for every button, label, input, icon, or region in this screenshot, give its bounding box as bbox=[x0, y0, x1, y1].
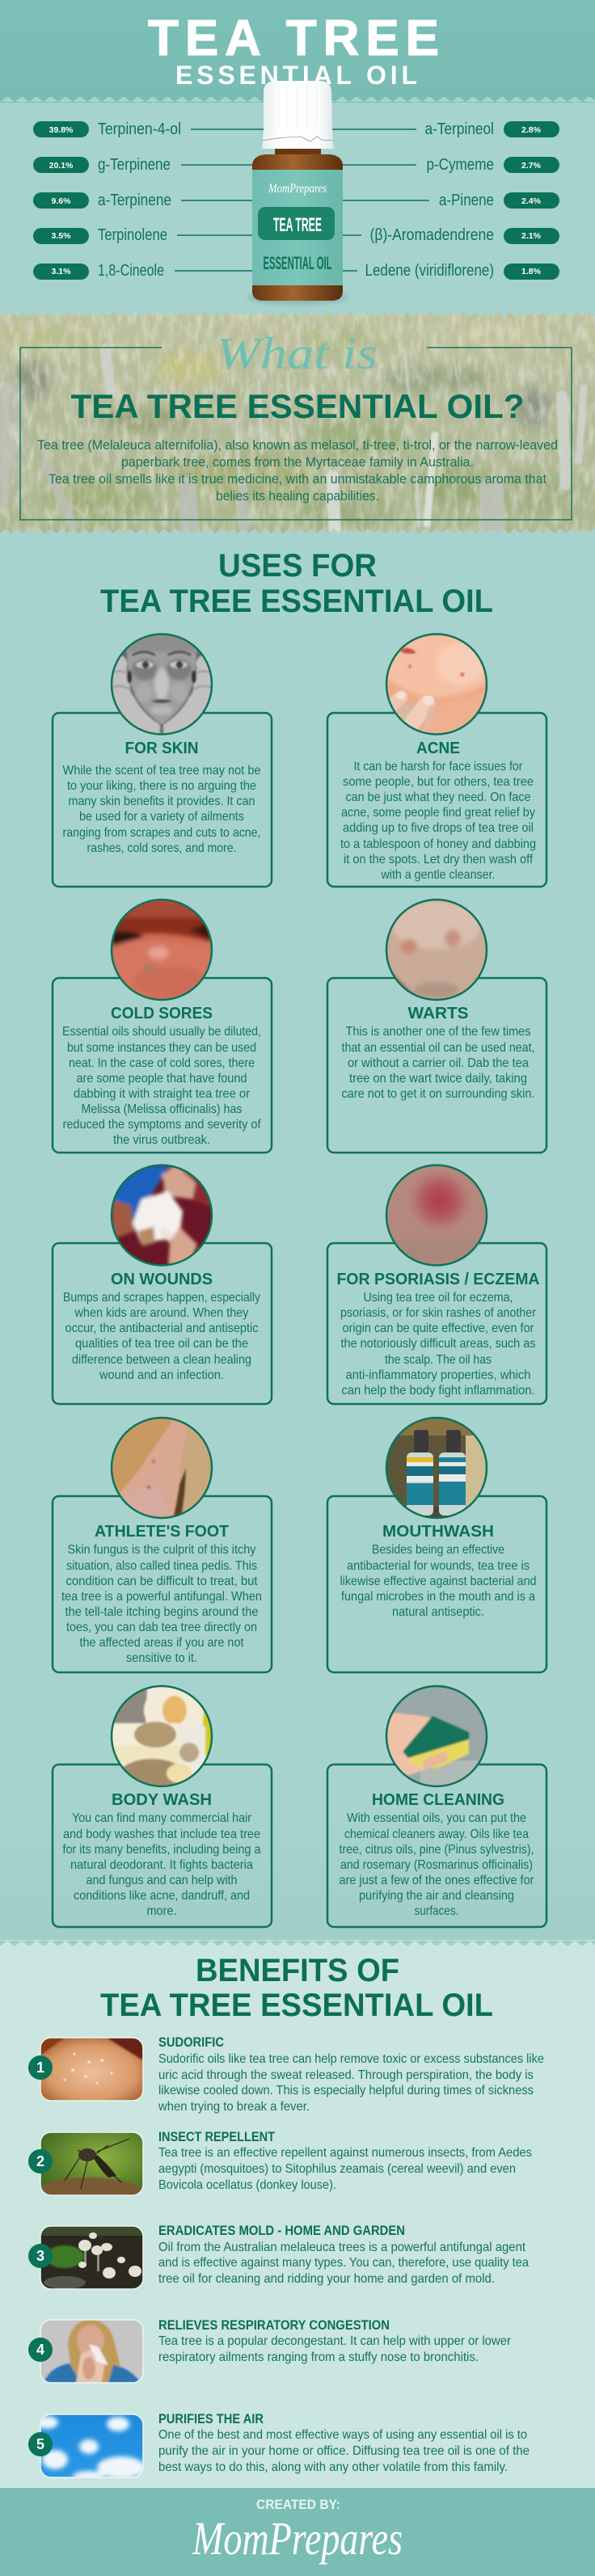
card text bbox=[62, 1025, 261, 1147]
number badge: 3 bbox=[36, 2248, 44, 2264]
card text: are just a few of the ones effective for bbox=[340, 1874, 534, 1887]
heading: uses for bbox=[100, 548, 493, 619]
card text: adding up to five drops of tea tree oil bbox=[343, 821, 534, 835]
panel: warts bbox=[327, 900, 546, 1153]
panel: mouthwash bbox=[327, 1418, 546, 1672]
card text: likewise effective against bacterial and bbox=[340, 1575, 537, 1588]
card text: but some instances they can be used bbox=[67, 1041, 256, 1055]
photo: sponge bbox=[386, 1686, 487, 1786]
card text: can help the body fight inflammation. bbox=[341, 1384, 535, 1398]
photo: acne skin bbox=[386, 634, 487, 734]
card text: that an essential oil can be used neat, bbox=[341, 1041, 535, 1055]
photo: soap and flower bbox=[112, 1686, 212, 1794]
benefit text: respiratory ailments ranging from a stuffy nose to bronchitis. bbox=[158, 2350, 479, 2364]
card text: the notoriously difficult areas, such as bbox=[341, 1337, 535, 1351]
card text: more. bbox=[147, 1904, 176, 1918]
panel: what is frame bbox=[20, 348, 572, 520]
benefit text: Tea tree is an effective repellent against numerous insects, from Aedes bbox=[158, 2146, 532, 2160]
panel: athletes foot bbox=[53, 1418, 272, 1672]
right compound names: Ledene (viridiflorene) bbox=[365, 262, 494, 280]
card text: Skin fungus is the culprit of this itchy bbox=[68, 1543, 255, 1557]
right percentages: 1.8% bbox=[521, 267, 542, 276]
benefit text bbox=[158, 2334, 512, 2364]
card text: dabbing it with straight tea tree or bbox=[74, 1087, 251, 1101]
benefit 4: respiratory congestion bbox=[28, 2317, 512, 2383]
card text: for its many benefits, including being a bbox=[63, 1843, 261, 1857]
bottle cap bbox=[262, 81, 334, 149]
card text: and body washes that include tea tree bbox=[63, 1828, 260, 1841]
photo: rash bbox=[386, 1166, 487, 1266]
card text bbox=[63, 1811, 261, 1918]
card text: condition can be difficult to treat, but bbox=[66, 1575, 258, 1588]
left percentages: 20.1% bbox=[49, 161, 74, 171]
card text: surfaces. bbox=[414, 1904, 459, 1918]
panel: forest photo band bbox=[0, 312, 595, 533]
title: ESSENTIAL OIL bbox=[175, 61, 417, 90]
card text: While the scent of tea tree may not be bbox=[63, 764, 261, 778]
card text: origin can be quite effective, even for bbox=[343, 1322, 534, 1335]
left percentages: 3.5% bbox=[52, 231, 71, 241]
card text: This is another one of the few times bbox=[346, 1025, 530, 1039]
right compound names: a-Terpineol bbox=[425, 120, 494, 138]
benefit heading: INSECT REPELLENT bbox=[158, 2129, 276, 2144]
card text bbox=[341, 1025, 535, 1101]
card text: neat. In the case of cold sores, there bbox=[69, 1056, 255, 1070]
panel: body wash bbox=[53, 1686, 272, 1927]
card heading: FOR PSORIASIS / ECZEMA bbox=[336, 1271, 540, 1288]
card heading: ATHLETE'S FOOT bbox=[95, 1523, 229, 1541]
panel: benefits background bbox=[0, 1940, 595, 2489]
card text: Besides being an effective bbox=[372, 1543, 504, 1557]
benefit text bbox=[158, 2052, 544, 2114]
left percentages: 3.1% bbox=[52, 267, 71, 276]
right compound names: a-Pinene bbox=[439, 192, 494, 209]
connector lines bbox=[175, 129, 429, 271]
card text: tree on the wart twice daily, taking bbox=[349, 1072, 527, 1086]
benefit text: tree oil for cleaning and ridding your home and garden of mold. bbox=[158, 2272, 495, 2286]
benefit text: aegypti (mosquitoes) to Sitophilus zeamais (cereal weevil) and even bbox=[158, 2162, 516, 2176]
card text: the affected areas if you are not bbox=[79, 1636, 244, 1650]
benefit text bbox=[158, 2428, 530, 2474]
card text: ranging from scrapes and cuts to acne, bbox=[63, 826, 260, 840]
heading: what is script: What is bbox=[216, 329, 378, 379]
card text: the tell-tale itching begins around the bbox=[65, 1605, 259, 1619]
number badge bbox=[28, 2149, 53, 2173]
card heading: ACNE bbox=[416, 740, 460, 757]
panel: header band bbox=[0, 0, 595, 103]
benefit text: best ways to do this, along with any other volatile from this family. bbox=[158, 2460, 508, 2474]
card heading: COLD SORES bbox=[111, 1005, 213, 1022]
card text: natural antiseptic. bbox=[392, 1605, 484, 1619]
right percentages: 2.4% bbox=[521, 196, 542, 206]
text block: intro: Tea tree oil smells like it is true medicine, with an unmistakable camphorous aroma that bbox=[49, 471, 546, 487]
bottle label: ESSENTIAL OIL bbox=[264, 253, 331, 273]
left compound names bbox=[98, 120, 181, 280]
benefit heading: PURIFIES THE AIR bbox=[158, 2411, 264, 2426]
card heading: ON WOUNDS bbox=[111, 1271, 213, 1288]
benefit text: Oil from the Australian melaleuca trees is a powerful antifungal agent bbox=[158, 2241, 526, 2254]
benefit 1: sudorific bbox=[28, 2034, 544, 2114]
heading: benefits: BENEFITS OF bbox=[196, 1953, 399, 1988]
card text: sensitive to it. bbox=[126, 1651, 197, 1665]
card text: it on the spots. Let dry then wash off bbox=[344, 853, 534, 866]
card text: acne, some people find great relief by bbox=[341, 806, 535, 820]
photo: mouthwash bottles bbox=[386, 1418, 487, 1518]
right compound names: (β)-Aromadendrene bbox=[370, 226, 494, 244]
card text: purifying the air and cleansing bbox=[359, 1889, 514, 1903]
left compound names: a-Terpinene bbox=[98, 192, 171, 209]
heading: benefits bbox=[100, 1953, 493, 2023]
heading: benefits: TEA TREE ESSENTIAL OIL bbox=[100, 1988, 493, 2023]
panel: acne bbox=[327, 634, 546, 887]
heading: tea tree essential oil question: TEA TREE ESSENTIAL OIL? bbox=[71, 387, 524, 425]
card text: With essential oils, you can put the bbox=[347, 1811, 526, 1825]
card text: anti-inflammatory properties, which bbox=[346, 1368, 530, 1382]
text block: intro: belies its healing capabilities. bbox=[216, 488, 379, 504]
bottle label bbox=[252, 170, 343, 285]
card text: chemical cleaners away. Oils like tea bbox=[344, 1828, 529, 1841]
benefit 2: insect repellent bbox=[28, 2129, 532, 2195]
card text: Using tea tree oil for eczema, bbox=[364, 1291, 513, 1305]
card text: to a tablespoon of honey and dabbing bbox=[340, 837, 536, 851]
photo: warts bbox=[386, 900, 487, 1000]
card text: qualities of tea tree oil can be the bbox=[75, 1337, 248, 1351]
number badge: 1 bbox=[36, 2060, 44, 2076]
card text: and fungus and can help with bbox=[86, 1874, 238, 1887]
photo: face bbox=[112, 634, 212, 734]
text block: intro: Tea tree (Melaleuca alternifolia), also known as melasol, ti-tree, ti-trol, or the narrow-leaved bbox=[37, 437, 558, 453]
card text: rashes, cold sores, and more. bbox=[87, 841, 236, 855]
benefit text: likewise cooled down. This is especially helpful during times of sickness bbox=[158, 2084, 534, 2097]
card text: tree, citrus oils, pine (Pinus sylvestris), bbox=[340, 1843, 534, 1857]
heading: uses for: TEA TREE ESSENTIAL OIL bbox=[100, 584, 493, 619]
benefit heading: RELIEVES RESPIRATORY CONGESTION bbox=[158, 2317, 390, 2333]
text block: intro: paperbark tree, comes from the Myrtaceae family in Australia. bbox=[121, 454, 474, 470]
photo: woman sneezing bbox=[40, 2320, 143, 2383]
card text: care not to get it on surrounding skin. bbox=[341, 1087, 535, 1101]
card text: natural deodorant. It fights bacteria bbox=[70, 1858, 253, 1872]
benefit text bbox=[158, 2241, 529, 2286]
number badge bbox=[28, 2055, 53, 2080]
heading: uses for: USES FOR bbox=[218, 548, 377, 584]
text block: intro bbox=[37, 437, 558, 504]
card text: fungal microbes in the mouth and is a bbox=[341, 1590, 535, 1604]
logo: MomPrepares: MomPrepares bbox=[192, 2512, 403, 2565]
panel: for skin bbox=[53, 634, 272, 887]
card text bbox=[340, 1811, 534, 1918]
card text: tea tree is a powerful antifungal. When bbox=[61, 1590, 262, 1604]
benefit text: Bovicola ocellatus (donkey louse). bbox=[158, 2178, 336, 2192]
card text: reduced the symptoms and severity of bbox=[63, 1118, 261, 1132]
card text: when kids are around. When they bbox=[74, 1306, 249, 1320]
benefit 5: purifies the air bbox=[28, 2411, 530, 2481]
number badge bbox=[28, 2244, 53, 2268]
number badge bbox=[28, 2338, 53, 2362]
benefit text: purify the air in your home or office. Diffusing tea tree oil is one of the bbox=[158, 2444, 530, 2458]
photo: sweat on skin bbox=[40, 2038, 143, 2101]
bottle illustration bbox=[247, 81, 348, 305]
card text: difference between a clean healing bbox=[72, 1353, 251, 1367]
card text: can be just what they need. On face bbox=[346, 791, 531, 804]
benefit 3: eradicates mold bbox=[28, 2223, 529, 2289]
card text bbox=[340, 1291, 537, 1398]
card text: or without a carrier oil. Dab the tea bbox=[348, 1056, 529, 1070]
card text: occur, the antibacterial and antiseptic bbox=[65, 1322, 259, 1335]
left compound names: g-Terpinene bbox=[98, 156, 171, 174]
benefit text: One of the best and most effective ways of using any essential oil is to bbox=[158, 2428, 527, 2442]
card text bbox=[63, 1291, 260, 1382]
card text bbox=[340, 760, 536, 882]
bottle label: TEA TREE bbox=[273, 214, 322, 236]
card text: conditions like acne, dandruff, and bbox=[74, 1889, 250, 1903]
panel: on wounds bbox=[53, 1166, 272, 1404]
number badge bbox=[28, 2432, 53, 2456]
left compound names: 1,8-Cineole bbox=[98, 262, 164, 280]
left percentages: 39.8% bbox=[49, 125, 74, 135]
card text: toes, you can dab tea tree directly on bbox=[66, 1621, 257, 1634]
card text: the virus outbreak. bbox=[113, 1133, 210, 1147]
card text: to your liking, there is no arguing the bbox=[67, 779, 256, 793]
photo: mosquito bbox=[40, 2132, 143, 2195]
card text bbox=[340, 1543, 537, 1619]
card heading: MOUTHWASH bbox=[382, 1523, 494, 1541]
card heading: WARTS bbox=[407, 1005, 469, 1022]
photo: sky bbox=[36, 2414, 146, 2481]
card text: antibacterial for wounds, tea tree is bbox=[347, 1559, 530, 1573]
card text: You can find many commercial hair bbox=[72, 1811, 252, 1825]
card heading: BODY WASH bbox=[112, 1791, 212, 1809]
right percentages: 2.7% bbox=[521, 161, 542, 171]
benefit text: Tea tree is a popular decongestant. It can help with upper or lower bbox=[158, 2334, 512, 2348]
card heading: FOR SKIN bbox=[124, 740, 199, 757]
panel: uses background bbox=[0, 103, 595, 1946]
number badge: 5 bbox=[36, 2436, 44, 2452]
panel: footer bbox=[0, 2488, 595, 2576]
benefit text: and is effective against many types. You can, therefore, use quality tea bbox=[158, 2256, 529, 2270]
card text bbox=[63, 764, 261, 855]
right percentages: 2.1% bbox=[521, 231, 542, 241]
photo: mushrooms bbox=[40, 2226, 143, 2289]
number badge: 4 bbox=[36, 2342, 44, 2358]
left compound names: Terpinen-4-ol bbox=[98, 120, 181, 138]
left compound pills bbox=[33, 121, 89, 280]
card text: wound and an infection. bbox=[99, 1368, 224, 1382]
card text: Melissa (Melissa officinalis) has bbox=[81, 1102, 243, 1116]
left percentages bbox=[49, 125, 74, 276]
photo: cold sore bbox=[112, 900, 212, 1000]
panel: psoriasis eczema bbox=[327, 1166, 546, 1404]
benefit text: when trying to break a fever. bbox=[158, 2100, 310, 2114]
benefit heading: SUDORIFIC bbox=[158, 2034, 224, 2050]
number badge: 2 bbox=[36, 2153, 44, 2169]
created by: CREATED BY: bbox=[256, 2497, 340, 2512]
right compound pills bbox=[504, 121, 559, 280]
card heading: HOME CLEANING bbox=[372, 1791, 504, 1809]
card text: Essential oils should usually be diluted, bbox=[62, 1025, 261, 1039]
title: TEA TREE bbox=[148, 11, 439, 66]
card text: many skin benefits it provides. It can bbox=[68, 795, 255, 808]
panel: cold sores bbox=[53, 900, 272, 1153]
left percentages: 9.6% bbox=[52, 196, 71, 206]
panel: home cleaning bbox=[327, 1686, 546, 1927]
card text: some people, but for others, tea tree bbox=[343, 775, 534, 789]
photo: bandaged wound bbox=[112, 1166, 212, 1266]
card text: and rosemary (Rosmarinus officinalis) bbox=[340, 1858, 533, 1872]
card text: It can be harsh for face issues for bbox=[354, 760, 523, 774]
right compound names bbox=[365, 120, 494, 280]
benefit text: uric acid through the sweat released. Through perspiration, the body is bbox=[158, 2068, 534, 2082]
card text: situation, also called tinea pedis. This bbox=[66, 1559, 257, 1573]
left compound names: Terpinolene bbox=[98, 226, 167, 244]
benefit heading: ERADICATES MOLD - HOME AND GARDEN bbox=[158, 2223, 405, 2238]
panel: chemical composition bbox=[33, 120, 559, 280]
card text: be used for a variety of ailments bbox=[79, 810, 244, 824]
card text: the scalp. The oil has bbox=[385, 1353, 492, 1367]
card text: psoriasis, or for skin rashes of another bbox=[340, 1306, 537, 1320]
card text bbox=[61, 1543, 262, 1665]
bottle label: MomPrepares bbox=[268, 182, 327, 196]
card text: are some people that have found bbox=[76, 1072, 247, 1086]
photo: foot bbox=[112, 1418, 212, 1518]
card text: with a gentle cleanser. bbox=[381, 868, 495, 882]
right compound names: p-Cymeme bbox=[427, 156, 494, 174]
benefit text: Sudorific oils like tea tree can help remove toxic or excess substances like bbox=[158, 2052, 544, 2066]
card text: Bumps and scrapes happen, especially bbox=[63, 1291, 260, 1305]
benefit text bbox=[158, 2146, 532, 2192]
right percentages: 2.8% bbox=[521, 125, 542, 135]
right percentages bbox=[521, 125, 542, 276]
